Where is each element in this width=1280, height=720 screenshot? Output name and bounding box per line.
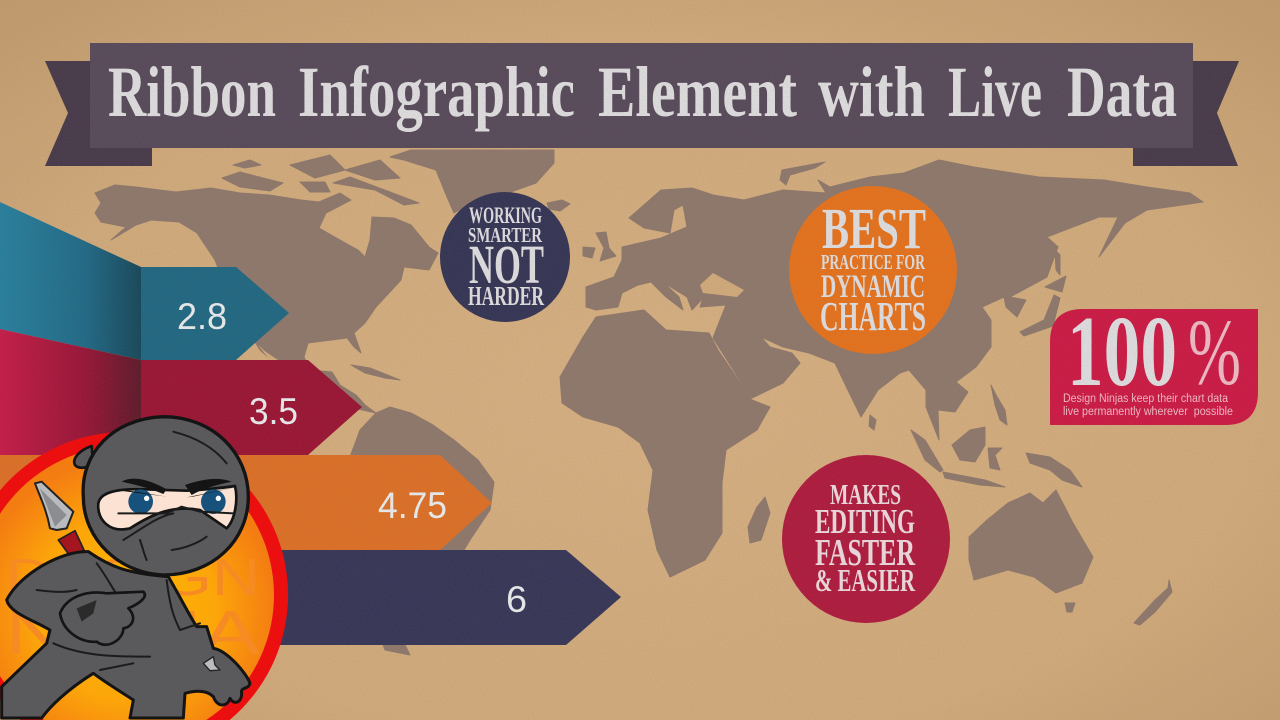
callout: makes editing faster: & EASIER: [815, 562, 916, 598]
head: [83, 417, 248, 575]
badge: design ninja logo: [0, 432, 288, 720]
map: Black Sea and Baja inlets: [258, 273, 744, 360]
title: with: [818, 52, 925, 132]
bar 4.75 orange: 4.75: [378, 485, 447, 526]
map: Greenland: [390, 150, 554, 213]
ribbon right tail: [1133, 61, 1239, 166]
callout: makes editing faster: EDITING: [815, 502, 915, 541]
map: Cuba: [351, 365, 400, 380]
callout: best practice: [789, 186, 957, 354]
map: North America: [95, 185, 438, 413]
badge: design ninja logo: DESIGN: [5, 549, 260, 607]
eyes: [128, 489, 226, 514]
map: South America: [345, 407, 494, 655]
title: Element: [598, 52, 797, 132]
title: Live: [948, 52, 1042, 132]
callout: makes editing faster: FASTER: [815, 532, 915, 574]
callout: makes editing faster: [782, 455, 950, 623]
callout: makes editing faster: MAKES: [830, 479, 901, 511]
callout: best practice: DYNAMIC: [821, 269, 925, 305]
bar 6 navy: 6: [506, 579, 527, 620]
map: Japan and Sakhalin: [1020, 250, 1066, 336]
kunai handle: [58, 531, 84, 556]
callout: working smarter not harder: [440, 192, 570, 322]
map: Africa: [560, 310, 770, 577]
map: Australia: [969, 490, 1093, 593]
ribbon main band: [90, 43, 1193, 148]
map: UK and Ireland: [583, 232, 616, 261]
ribbon chart: [0, 202, 621, 645]
map: Eurasia: [586, 160, 1203, 440]
ribbon left tail: [45, 61, 152, 166]
mask folds: [118, 432, 233, 560]
map: Madagascar: [748, 497, 770, 543]
title: Ribbon: [108, 52, 276, 132]
body: [2, 552, 250, 718]
bar 3.5 crimson: [0, 329, 362, 455]
callout: best practice: PRACTICE FOR: [821, 250, 926, 274]
callout: best practice: BEST: [822, 196, 926, 261]
body folds: [37, 563, 200, 670]
map: Arctic islands: [222, 155, 419, 205]
bar 6 navy: [0, 550, 621, 645]
map: Tasmania and New Zealand: [1065, 580, 1172, 625]
eye opening: [98, 486, 236, 529]
callout: 100 percent: live permanently wherever possible: [1063, 406, 1233, 418]
icon: ninja mascot: [2, 417, 250, 718]
callout: best practice: CHARTS: [820, 293, 926, 339]
map: Iceland: [547, 200, 570, 211]
callout: working smarter not harder: NOT: [469, 234, 544, 295]
callout: 100 percent: 100: [1067, 295, 1177, 407]
callout: 100 percent: [1050, 295, 1258, 425]
map: Southeast Asia islands: [869, 385, 1082, 487]
hood knot: [74, 446, 93, 468]
glove emblem: [203, 657, 220, 671]
callout: 100 percent: %: [1188, 301, 1241, 405]
bar 4.75 orange: [0, 455, 492, 550]
callout: working smarter not harder: HARDER: [468, 281, 544, 311]
world map: [95, 150, 1203, 655]
title: Infographic: [298, 52, 575, 132]
badge: design ninja logo: NINJA: [5, 599, 261, 668]
folded hands: [60, 592, 145, 645]
kunai blade: [35, 482, 73, 530]
callout: working smarter not harder: WORKING: [469, 203, 542, 228]
callout: working smarter not harder: SMARTER: [468, 223, 543, 247]
title: Data: [1067, 52, 1177, 132]
bar 2.8 teal: 2.8: [177, 296, 227, 337]
callout: 100 percent: Design Ninjas keep their chart data: [1063, 393, 1229, 405]
title: [108, 52, 1177, 132]
map: Novaya Zemlya: [780, 162, 825, 185]
title ribbon: [45, 43, 1239, 166]
bar 3.5 crimson: 3.5: [249, 391, 298, 432]
eyebrows: [120, 479, 235, 497]
bar 2.8 teal: [0, 202, 289, 360]
